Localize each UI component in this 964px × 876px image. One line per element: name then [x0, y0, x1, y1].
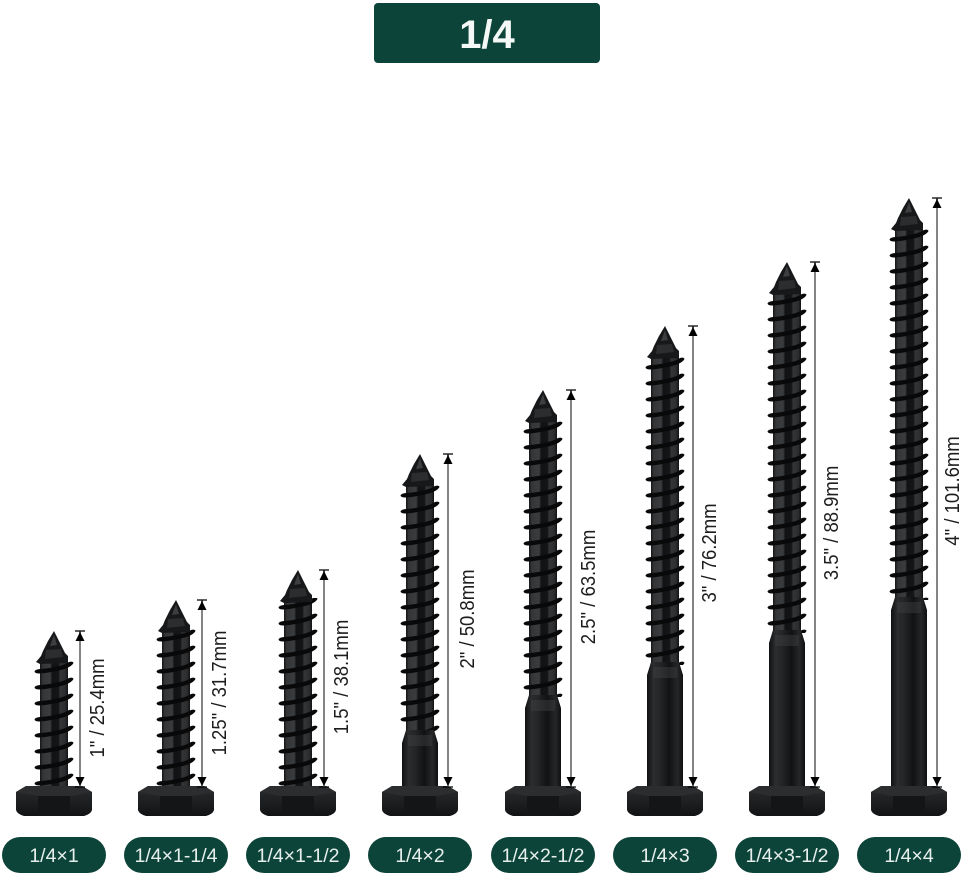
- pill: 1/4x3-1/2: 1/4×3-1/2: [746, 845, 828, 867]
- pill: 1/4x2-1/2: 1/4×2-1/2: [502, 845, 584, 867]
- pill: 1/4x1-1/4: [124, 837, 228, 873]
- title badge: 1/4: [459, 13, 516, 57]
- pill: 1/4x1-1/2: [246, 837, 350, 873]
- screw 1/4x1 with dimension: [16, 631, 109, 816]
- screw 1/4x2-1/2 with dimension: 2.5" / 63.5mm: [578, 530, 600, 644]
- screw 1/4x1-1/2 with dimension: 1.5" / 38.1mm: [331, 620, 353, 734]
- screw 1/4x3-1/2 with dimension: 3.5" / 88.9mm: [821, 466, 843, 580]
- screw 1/4x4 with dimension: 4" / 101.6mm: [942, 436, 964, 546]
- screw 1/4x3 with dimension: 3" / 76.2mm: [699, 503, 721, 603]
- pill: 1/4x2: [368, 837, 472, 873]
- screw 1/4x1-1/2 with dimension: [260, 570, 353, 816]
- pill: 1/4x2-1/2: [491, 837, 595, 873]
- pill: 1/4x1-1/2: 1/4×1-1/2: [257, 845, 339, 867]
- screw 1/4x1-1/4 with dimension: [138, 600, 231, 816]
- pill: 1/4x4: [857, 837, 961, 873]
- screw 1/4x1 with dimension: 1" / 25.4mm: [87, 658, 109, 758]
- screw 1/4x3-1/2 with dimension: [749, 262, 843, 816]
- screw 1/4x2 with dimension: [382, 454, 479, 816]
- pill: 1/4x3: [613, 837, 717, 873]
- pill: 1/4x2: 1/4×2: [395, 845, 445, 867]
- pill: 1/4x1: 1/4×1: [29, 845, 79, 867]
- screw 1/4x1-1/4 with dimension: 1.25" / 31.7mm: [209, 631, 231, 755]
- pill: 1/4x4: 1/4×4: [884, 845, 934, 867]
- pill: 1/4x1-1/4: 1/4×1-1/4: [135, 845, 218, 867]
- screw 1/4x2 with dimension: 2" / 50.8mm: [457, 569, 479, 669]
- screw 1/4x4 with dimension: [871, 198, 964, 816]
- pill: 1/4x3: 1/4×3: [640, 845, 690, 867]
- screw 1/4x3 with dimension: [627, 326, 721, 816]
- pill: 1/4x1: [2, 837, 106, 873]
- screw 1/4x2-1/2 with dimension: [505, 390, 600, 816]
- title badge: [374, 3, 600, 63]
- size pills: [2, 837, 961, 873]
- pill: 1/4x3-1/2: [735, 837, 839, 873]
